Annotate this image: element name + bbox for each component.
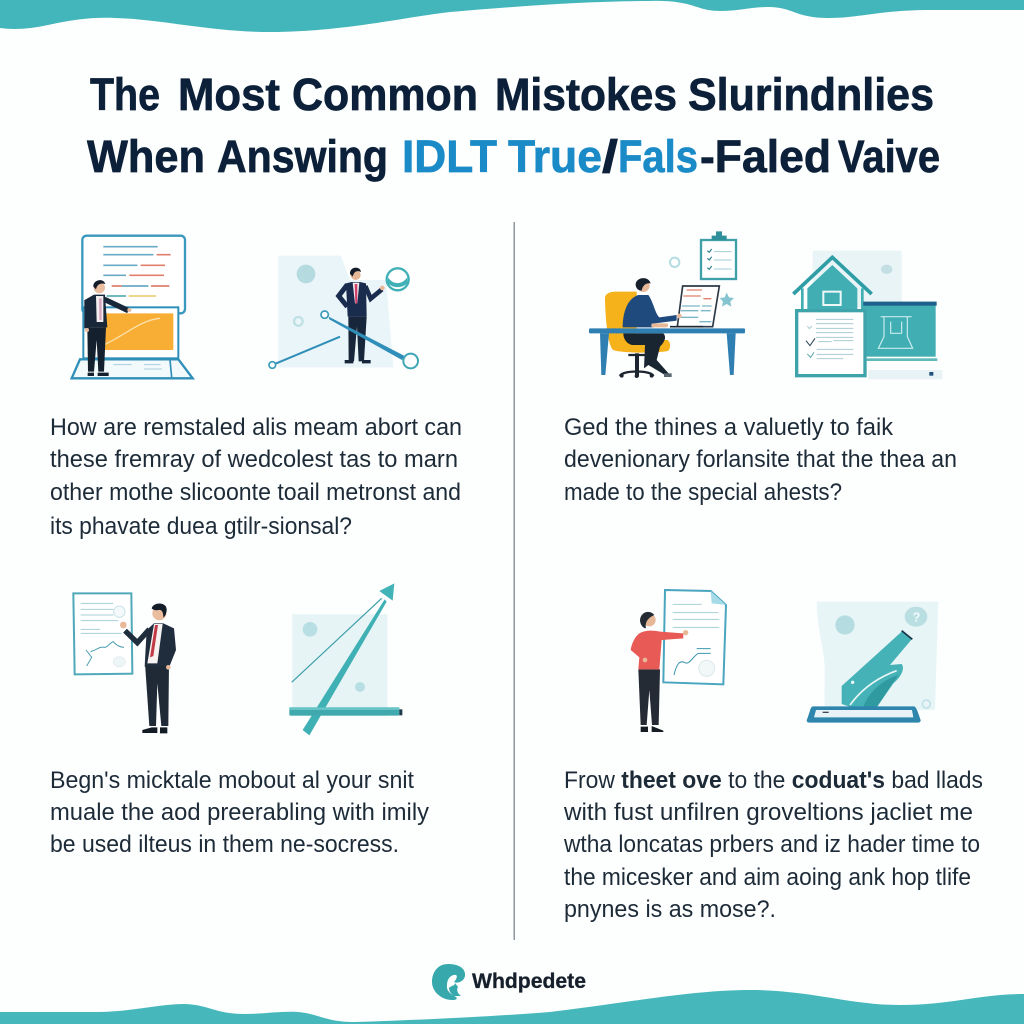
text block: pnynes is as mose?. — [564, 896, 776, 923]
text block: Ged the thines a valuetly to faik — [564, 414, 894, 441]
text block — [563, 767, 983, 923]
text block: How are remstaled alis meam abort can — [50, 414, 462, 441]
panel: top left — [50, 236, 462, 540]
illustration: telescope on tablet: ? — [913, 611, 920, 625]
title: Fals — [618, 131, 698, 182]
text block — [50, 414, 462, 540]
panel: bottom left — [50, 583, 429, 858]
text block: devenionary forlansite that the thea an — [564, 446, 957, 473]
illustration: man pointing at signed document — [73, 593, 176, 733]
text block: other mothe slicoonte toail metronst and — [50, 479, 461, 506]
title — [87, 69, 940, 182]
title: Most — [178, 69, 280, 120]
title: True — [508, 131, 602, 182]
text block: the micesker and aim aoing ank hop tlife — [564, 864, 971, 891]
illustration: man presenting at laptop — [72, 236, 193, 378]
title: Common — [292, 69, 478, 120]
text block: with fust unfilren groveltions jacliet me — [563, 799, 973, 826]
illustration: house and document — [793, 251, 942, 379]
title: Mistokes — [495, 69, 677, 120]
illustration: woman pointing at document — [631, 590, 726, 732]
text block: wtha loncatas prbers and iz hader time to — [563, 831, 980, 858]
illustration: telescope on tablet — [807, 602, 938, 723]
title: / — [602, 131, 619, 182]
logo: Whdpedete — [432, 964, 586, 1000]
text block: Begn's micktale mobout al your snit — [50, 767, 414, 794]
text block: these fremray of wedcolest tas to marn — [50, 446, 458, 473]
center divider — [514, 222, 515, 940]
illustration: man with connected line diagram — [269, 256, 418, 368]
bottom wave — [0, 990, 1024, 1024]
text block: made to the special ahests? — [564, 479, 842, 506]
title: The — [90, 69, 160, 120]
title: Slurindnlies — [688, 69, 934, 120]
panel: bottom right — [563, 590, 983, 923]
wordmark: Whdpedete — [472, 970, 586, 993]
text block: its phavate duea gtilr-sionsal? — [50, 513, 352, 540]
icon: wave swirl — [432, 964, 465, 1000]
text block: be used ilteus in them ne-socress. — [50, 831, 399, 858]
text block — [50, 767, 429, 858]
text block: Frow theet ove to the coduat's bad llads — [564, 767, 983, 794]
text block — [564, 414, 957, 506]
illustration: person working at desk — [589, 231, 745, 378]
panel: top right — [564, 231, 957, 506]
text block: muale the aod preerabling with imily — [50, 799, 429, 826]
illustration: arrow and ruler — [289, 583, 402, 735]
title: Vaive — [838, 131, 940, 182]
title: Answing — [217, 131, 388, 182]
title: -Faled — [700, 131, 831, 182]
top wave — [0, 0, 1024, 32]
title: When — [87, 131, 205, 182]
title: IDLT — [402, 131, 497, 182]
